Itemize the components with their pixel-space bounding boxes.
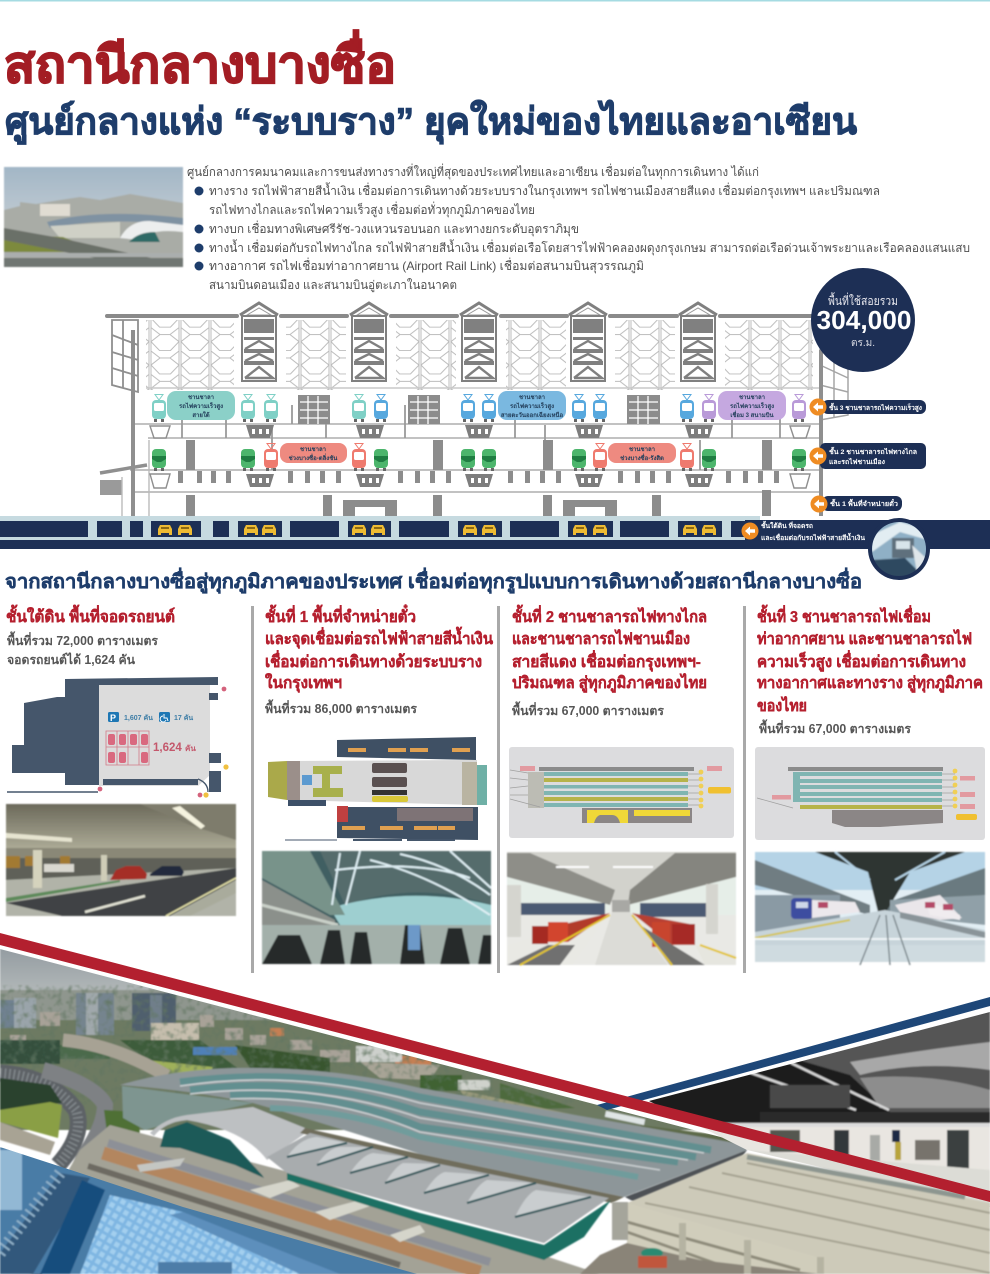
heading: level 2: สายสีแดง เชื่อมต่อกรุงเทพฯ-	[512, 650, 701, 672]
heading: level 1: ชั้นที่ 1 พื้นที่จำหน่ายตั๋ว	[265, 604, 416, 626]
intro text block: ทางน้ำ เชื่อมต่อกับรถไฟทางไกล รถไฟฟ้าสายสีน้ำเงิน เชื่อมต่อเรือโดยสารไฟฟ้าคลองผดุงกรุงเกษม สามารถต่อเรือด่วนเจ้าพระยาและเรือคลองแสนแสบ	[209, 239, 970, 256]
level 2 platform plan	[509, 747, 734, 838]
floor label: level 2	[810, 443, 926, 469]
blue diagonal	[597, 997, 990, 1110]
heading: level 2	[512, 604, 707, 694]
heading: level 2: ชั้นที่ 2 ชานชาลารถไฟทางไกล	[512, 604, 707, 626]
platform pill: high speed blue	[498, 391, 566, 420]
area text: level 3: พื้นที่รวม 67,000 ตารางเมตร	[759, 719, 911, 736]
floor label: level 1: ชั้น 1 พื้นที่จำหน่ายตั๋ว	[830, 498, 898, 508]
heading: level 3	[757, 604, 983, 715]
underground parking band	[0, 516, 990, 549]
level 3 platform plan	[755, 747, 985, 840]
usable area badge: พื้นที่ใช้สอยรวม	[828, 292, 898, 308]
parking floor plan: 17 คัน	[174, 714, 193, 722]
platform pill: high speed blue: สายตะวันออกเฉียงเหนือ	[501, 411, 564, 419]
platform pill: high speed purple	[718, 391, 786, 420]
platform pill: Bang Sue-Rangsit: ช่วงบางซื่อ-รังสิต	[620, 453, 664, 462]
platform pill: high speed purple: รถไฟความเร็วสูง	[730, 401, 774, 411]
platform pill: high speed purple: เชื่อม 3 สนามบิน	[730, 410, 775, 419]
platform troughs	[246, 425, 713, 487]
photo: commuter platform	[507, 852, 736, 965]
heading: level 2: ปริมณฑล สู่ทุกภูมิภาคของไทย	[512, 673, 707, 694]
upper wave roof	[120, 1068, 747, 1205]
track platforms	[580, 1153, 990, 1274]
intro text block: สนามบินดอนเมือง และสนามบินอู่ตะเภาในอนาคต	[209, 278, 457, 293]
highways	[0, 1040, 167, 1274]
heading: level 1: ในกรุงเทพฯ	[265, 673, 342, 693]
photo: blue line train circle	[868, 518, 930, 580]
parking floor plan: 1,624 คัน	[153, 742, 196, 754]
area text: level 2: พื้นที่รวม 67,000 ตารางเมตร	[512, 701, 664, 718]
towers	[240, 303, 717, 381]
platform pill: high speed teal	[167, 391, 235, 420]
area text: level 1: พื้นที่รวม 86,000 ตารางเมตร	[265, 699, 417, 716]
floor label: level 1	[810, 496, 902, 512]
top accent line	[0, 0, 990, 2]
usable area badge: 304,000	[816, 305, 912, 335]
intro text block: ทางราง รถไฟฟ้าสายสีน้ำเงิน เชื่อมต่อการเดินทางด้วยระบบรางในกรุงเทพฯ รถไฟชานเมืองสายสีแดง เชื่อมต่อกรุงเทพฯ และปริมณฑล	[209, 182, 880, 199]
platform pill: high speed teal: ชานชาลา	[188, 394, 214, 401]
station front arch	[150, 1107, 310, 1178]
basement label: และเชื่อมต่อกับรถไฟฟ้าสายสีน้ำเงิน	[761, 532, 866, 542]
intro text block: ศูนย์กลางการคมนาคมและการขนส่งทางรางที่ใหญ่ที่สุดของประเทศไทยและอาเซียน เชื่อมต่อในทุกการเดินทาง ได้แก่	[187, 163, 759, 180]
platform pill: Bang Sue-Taling Chan: ช่วงบางซื่อ-ตลิ่งชัน	[289, 453, 338, 462]
sky and city	[0, 940, 750, 1145]
subtitle: ศูนย์กลางแห่ง “ระบบราง” ยุคใหม่ของไทยและอาเซียน	[5, 99, 857, 145]
cross-section diagram of station	[100, 303, 848, 516]
heading: level 1: เชื่อมต่อการเดินทางด้วยระบบราง	[265, 650, 482, 671]
intro text block: รถไฟทางไกลและรถไฟความเร็วสูง เชื่อมต่อทั่วทุกภูมิภาคของไทย	[209, 201, 535, 218]
heading: level 1	[265, 604, 493, 693]
platform pill: Bang Sue-Taling Chan	[280, 443, 347, 463]
photo: station thumbnail	[4, 167, 183, 267]
parking floor plan	[7, 677, 229, 798]
platform pill: high speed blue: รถไฟความเร็วสูง	[510, 401, 554, 411]
heading: level 3: ของไทย	[757, 696, 807, 715]
floor label: level 2: และรถไฟชานเมือง	[829, 457, 885, 466]
panel: basement parking	[6, 604, 236, 916]
area text: basement: จอดรถยนต์ได้ 1,624 คัน	[7, 652, 135, 667]
panel: level 1	[262, 604, 493, 964]
floor label: level 3: ชั้น 3 ชานชาลารถไฟความเร็วสูง	[829, 402, 922, 413]
platform pill: Bang Sue-Rangsit: ชานชาลา	[629, 446, 655, 453]
floor structure	[100, 330, 822, 516]
intro text block: ทางบก เชื่อมทางพิเศษศรีรัช-วงแหวนรอบนอก และทางยกระดับอุตราภิมุข	[209, 220, 579, 237]
parking floor plan: P	[110, 713, 116, 723]
high-speed platform trains	[152, 394, 806, 422]
intro text block	[187, 163, 970, 293]
heading: basement: ชั้นใต้ดิน พื้นที่จอดรถยนต์	[6, 604, 175, 626]
usable area badge: ตร.ม.	[851, 338, 875, 349]
title: สถานีกลางบางซื่อ	[4, 30, 396, 93]
platform pill: high speed teal: สายใต้	[192, 411, 210, 419]
floor label: level 3	[810, 398, 926, 416]
platform pill: high speed purple: ชานชาลา	[739, 394, 765, 401]
panel: level 3	[755, 604, 985, 965]
platform pill: Bang Sue-Taling Chan: ชานชาลา	[300, 446, 326, 453]
basement label	[742, 520, 866, 542]
building lattice facade	[107, 316, 848, 420]
heading: level 3: ท่าอากาศยาน และชานชาลารถไฟ	[757, 629, 972, 648]
heading: level 2: และชานชาลารถไฟชานเมือง	[512, 629, 690, 648]
platform pill: high speed teal: รถไฟความเร็วสูง	[179, 401, 223, 411]
area text: basement	[7, 631, 158, 667]
photo: underground platform interior	[640, 1010, 990, 1210]
panel: level 2	[507, 604, 736, 965]
lower roof with dormers	[267, 1133, 609, 1243]
platform pill: Bang Sue-Rangsit	[608, 443, 676, 463]
facade glass upper	[122, 1086, 253, 1130]
intro text block: ทางอากาศ รถไฟเชื่อมท่าอากาศยาน (Airport Rail Link) เชื่อมต่อสนามบินสุวรรณภูมิ	[209, 257, 644, 274]
long-distance and commuter trains	[152, 444, 806, 471]
heading: level 3: ความเร็วสูง เชื่อมต่อการเดินทาง	[757, 650, 966, 673]
heading: level 3: ชั้นที่ 3 ชานชาลารถไฟเชื่อม	[757, 604, 931, 626]
photo: aerial of Bang Sue station	[0, 940, 750, 1274]
usable area badge	[811, 268, 915, 372]
green field	[0, 1078, 140, 1140]
floor label: level 2: ชั้น 2 ชานชาลารถไฟทางไกล	[829, 446, 917, 456]
photo: parking garage	[6, 804, 236, 916]
platform pill: high speed blue: ชานชาลา	[519, 394, 545, 401]
photo: high speed platform	[755, 852, 985, 965]
red diagonal	[0, 933, 990, 1202]
level 1 floor plan	[268, 737, 487, 841]
parking floor plan: 1,607 คัน	[124, 714, 153, 722]
photo: concourse	[262, 851, 491, 964]
road strip	[0, 1122, 600, 1274]
column dividers	[251, 606, 746, 973]
basement label: ชั้นใต้ดิน ที่จอดรถ	[761, 520, 813, 530]
station facade	[287, 1173, 611, 1260]
section heading: จากสถานีกลางบางซื่อสู่ทุกภูมิภาคของประเทศ เชื่อมต่อทุกรูปแบบการเดินทางด้วยสถานีกลางบางซื่อ	[5, 567, 862, 595]
heading: level 1: และจุดเชื่อมต่อรถไฟฟ้าสายสีน้ำเงิน	[265, 626, 493, 649]
blue overlay of water	[0, 1147, 420, 1274]
area text: basement: พื้นที่รวม 72,000 ตารางเมตร	[7, 631, 158, 648]
